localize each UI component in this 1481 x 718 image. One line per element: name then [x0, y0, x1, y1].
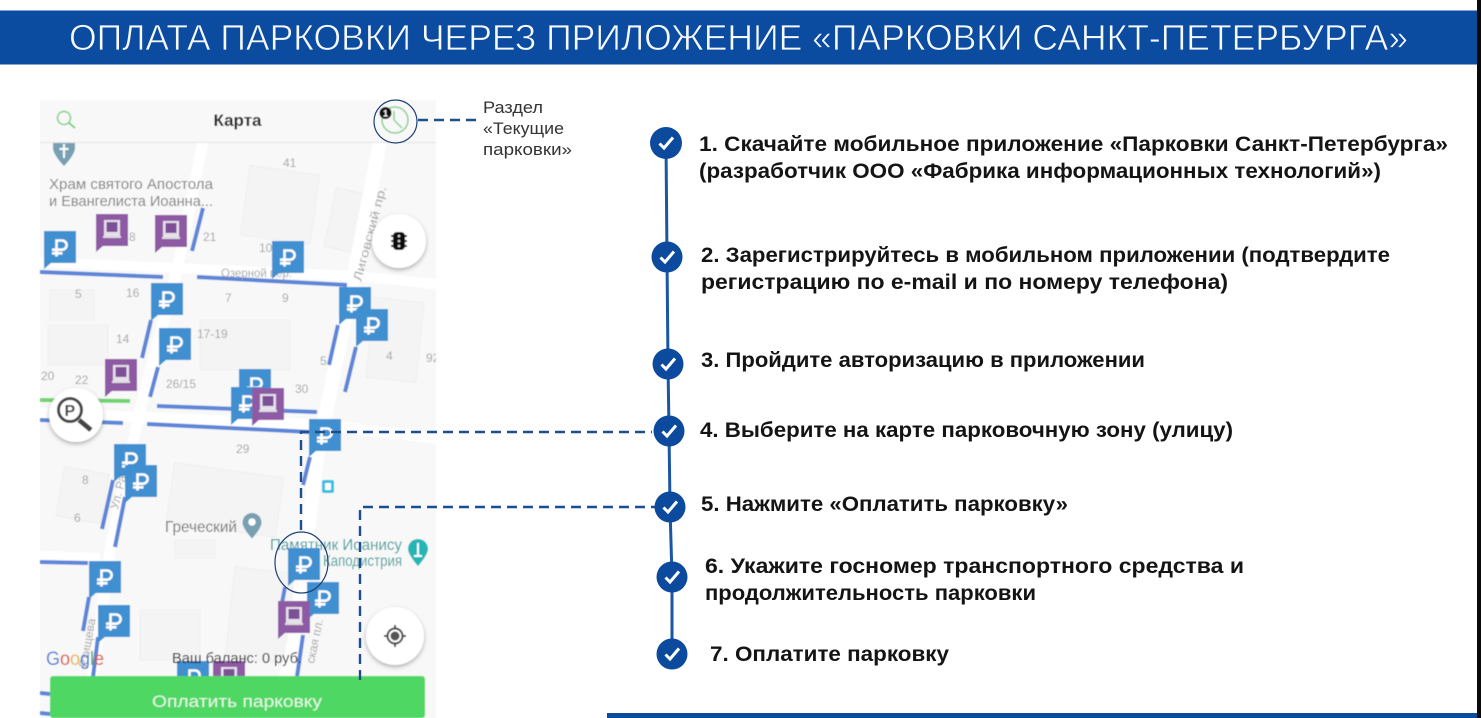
- map labels: 9: [282, 291, 289, 305]
- step 5 text: 5. Нажмите «Оплатить парковку»: [701, 492, 1068, 516]
- map labels: 22: [75, 373, 89, 387]
- right edge strip: [1477, 0, 1481, 718]
- icon: step 2 check: [652, 242, 682, 272]
- timeline: [650, 127, 688, 670]
- map labels: 5: [75, 287, 82, 301]
- map labels: 26/15: [166, 377, 196, 391]
- callout label: current parkings section: [483, 98, 572, 159]
- map labels: 7: [225, 291, 232, 305]
- parking street segments: [40, 208, 356, 714]
- step 1 text: [699, 132, 1448, 183]
- step 6 text: 6. Укажите госномер транспортного средства и: [705, 554, 1244, 578]
- map labels: 30: [295, 382, 309, 396]
- icon: step 4 check: [654, 416, 684, 446]
- roads: [282, 192, 365, 664]
- map labels: Ртищева: [76, 617, 99, 669]
- step 1 text: 1. Скачайте мобильное приложение «Парковки Санкт-Петербурга»: [699, 132, 1448, 156]
- icon: search: [58, 112, 75, 128]
- pay button: [50, 676, 425, 718]
- callout label: current parkings section: «Текущие: [483, 119, 564, 138]
- icon: clock: 1: [383, 108, 388, 118]
- step 6 text: продолжительность парковки: [705, 581, 1036, 605]
- icon: traffic light button: [372, 214, 426, 268]
- map labels: Лиговский пр.: [350, 184, 389, 283]
- title banner: [0, 10, 1477, 64]
- map labels: 21: [203, 230, 217, 244]
- step 2 text: регистрацию по e-mail и по номеру телефона): [701, 270, 1228, 294]
- map labels: Памятник Иоанису: [270, 537, 402, 554]
- callout label: current parkings section: Раздел: [483, 98, 543, 117]
- map labels: 6: [74, 511, 81, 525]
- step 2 text: 2. Зарегистрируйтесь в мобильном приложении (подтвердите: [701, 243, 1390, 267]
- step 1 text: (разработчик ООО «Фабрика информационных технологий»): [699, 159, 1381, 183]
- map labels: 16: [126, 286, 140, 300]
- step 6 text: [705, 554, 1244, 605]
- parking markers: [44, 214, 388, 699]
- icon: Greek place marker: [242, 513, 262, 538]
- icon: step 7 check: [656, 638, 688, 670]
- step 7 text: 7. Оплатите парковку: [710, 642, 949, 666]
- map heading: Карта: [214, 111, 262, 130]
- footer bar: [607, 713, 1477, 718]
- map labels: 20: [41, 369, 55, 383]
- balance text: Ваш баланс: 0 руб.: [172, 651, 302, 667]
- map labels: Храм святого Апостола: [49, 176, 214, 193]
- callout circle: current parkings: [374, 100, 417, 143]
- map labels: Ул. Ра: [107, 473, 129, 511]
- map labels: ская пл.: [303, 618, 326, 665]
- map labels: 10: [259, 241, 273, 255]
- panel: phone map screenshot: [40, 100, 440, 718]
- map labels: [41, 156, 440, 669]
- map background: [40, 138, 440, 718]
- icon: step 1 check: [650, 127, 682, 159]
- icon: clock: [380, 107, 408, 133]
- icon: bus stop: [322, 480, 334, 493]
- map labels: Каподистрия: [323, 553, 402, 570]
- map labels: 29: [236, 442, 250, 456]
- step 2 text: [701, 243, 1390, 294]
- icon: step 5 check: [654, 492, 686, 522]
- icon: church marker: [52, 142, 76, 166]
- app top bar: [40, 100, 436, 142]
- pay button: Оплатить парковку: [152, 692, 323, 711]
- callout circle: selected zone: [275, 532, 328, 593]
- callout label: current parkings section: парковки»: [483, 140, 572, 159]
- icon: step 3 check: [652, 348, 684, 380]
- arrow: dashed connector to section label: [418, 119, 476, 121]
- icon: locate button: [366, 607, 424, 665]
- icon: parking search button: P: [64, 403, 76, 420]
- icon: monument marker: [408, 539, 428, 566]
- map labels: 92: [426, 351, 440, 365]
- arrow: dashed connector to step 5: [360, 507, 656, 680]
- map labels: 14: [116, 332, 130, 346]
- map labels: 4: [386, 349, 393, 363]
- step 3 text: 3. Пройдите авторизацию в приложении: [701, 348, 1145, 372]
- map labels: Греческий: [165, 519, 237, 536]
- icon: step 6 check: [656, 562, 688, 592]
- icon: parking search button: [49, 388, 103, 442]
- map labels: Озерной пер.: [221, 266, 292, 280]
- map labels: 8: [129, 230, 136, 244]
- map labels: 41: [283, 156, 297, 170]
- map labels: 8: [82, 473, 89, 487]
- map labels: и Евангелиста Иоанна...: [49, 193, 213, 210]
- map labels: 5: [320, 354, 327, 368]
- map labels: 17-19: [197, 327, 228, 341]
- step 4 text: 4. Выберите на карте парковочную зону (улицу): [700, 418, 1233, 442]
- arrow: dashed connector to step 4: [301, 432, 652, 530]
- Google logo: Google: [46, 649, 104, 670]
- title banner: ОПЛАТА ПАРКОВКИ ЧЕРЕЗ ПРИЛОЖЕНИЕ «ПАРКОВКИ САНКТ-ПЕТЕРБУРГА»: [69, 17, 1408, 58]
